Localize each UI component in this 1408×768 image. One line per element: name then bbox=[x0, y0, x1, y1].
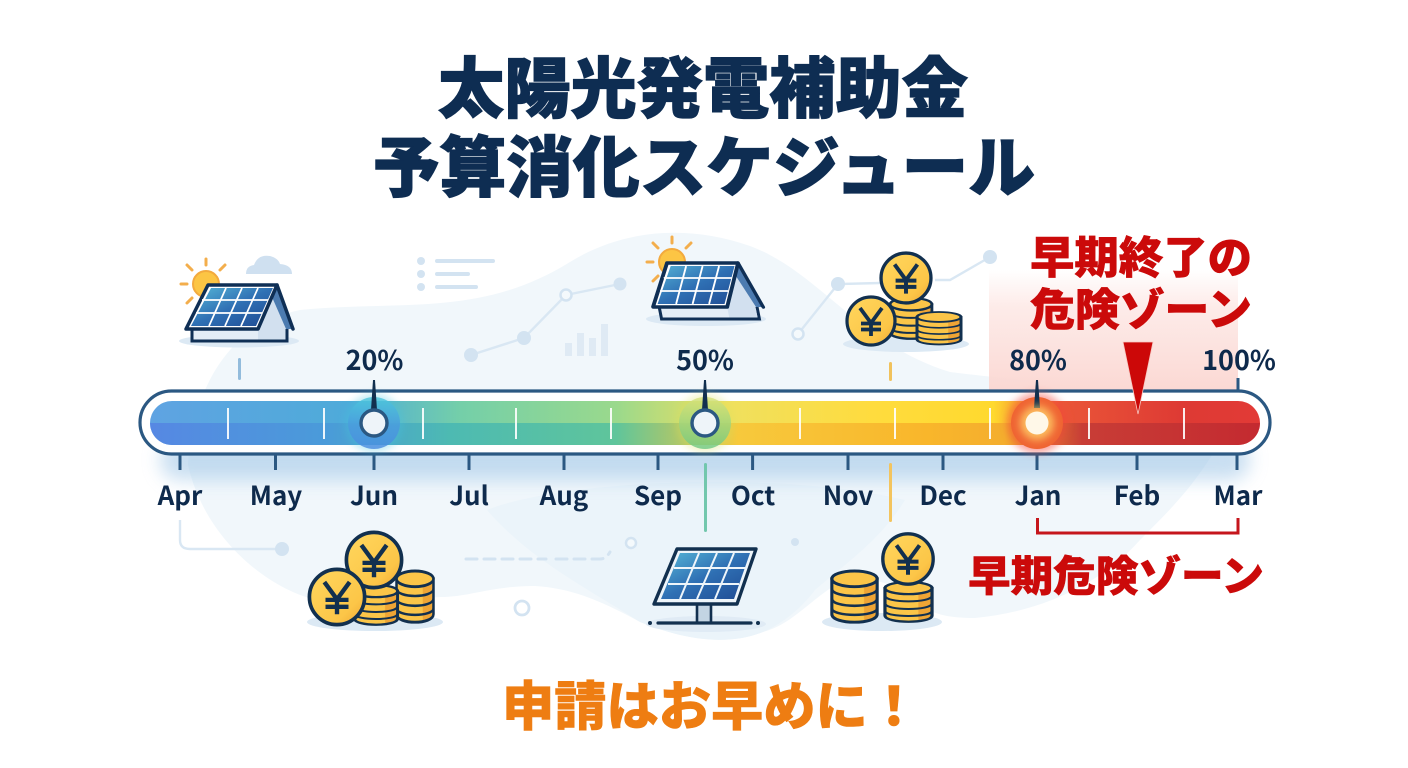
month labels: Sep bbox=[634, 476, 682, 513]
icon: house with solar panel and sun (September) bbox=[644, 237, 766, 326]
month labels bbox=[157, 476, 1263, 513]
month labels: Jun bbox=[350, 476, 398, 513]
icon: yen coin on stacks (November) bbox=[822, 534, 942, 631]
marker: 20% bbox=[345, 339, 403, 452]
marker: 50%: 50% bbox=[676, 339, 734, 378]
month labels: Dec bbox=[919, 476, 967, 513]
arrow: red down pointer bbox=[1123, 342, 1153, 414]
marker: 20%: 20% bbox=[346, 339, 403, 378]
callout: early termination danger zone bbox=[1030, 222, 1252, 338]
icon: ground solar panel bbox=[646, 549, 766, 632]
month labels: May bbox=[250, 476, 302, 513]
month labels: Jan bbox=[1015, 476, 1061, 513]
month labels: Apr bbox=[157, 476, 203, 513]
marker: 80% bbox=[1007, 339, 1067, 453]
progress bar bbox=[140, 391, 1270, 480]
month labels: Mar bbox=[1214, 476, 1263, 513]
decorative faint charts bbox=[180, 250, 997, 615]
red danger zone backdrop bbox=[989, 270, 1238, 391]
month labels: Oct bbox=[731, 476, 775, 513]
connector: September green line bbox=[704, 463, 707, 532]
label: early danger zone: 早期危険ゾーン bbox=[968, 543, 1264, 604]
background blobs bbox=[188, 233, 1212, 640]
icon: house with solar panel and sun (April) bbox=[179, 256, 299, 380]
month labels: Aug bbox=[539, 476, 589, 513]
marker: 50% bbox=[676, 339, 734, 452]
month labels: Jul bbox=[449, 476, 489, 513]
title: 予算消化スケジュール bbox=[373, 115, 1035, 211]
title: 太陽光発電補助金 bbox=[438, 36, 968, 132]
label: 100%: 100% bbox=[1202, 339, 1276, 378]
month labels: Feb bbox=[1114, 476, 1160, 513]
month tick marks bbox=[180, 378, 1238, 470]
connector: November orange line bbox=[889, 463, 892, 522]
call to action: 申請はお早めに！ bbox=[502, 665, 920, 741]
callout: early termination danger zone: 危険ゾーン bbox=[1030, 274, 1252, 338]
icon: yen coins (June) bbox=[307, 532, 443, 631]
bracket: Jan to Mar bbox=[1038, 518, 1238, 533]
icon: yen coins (December) bbox=[843, 253, 969, 381]
callout: early termination danger zone: 早期終了の bbox=[1030, 222, 1252, 286]
infographic canvas bbox=[138, 54, 1275, 731]
marker: 80%: 80% bbox=[1009, 339, 1067, 378]
month labels: Nov bbox=[823, 476, 873, 513]
title bbox=[373, 36, 1035, 211]
